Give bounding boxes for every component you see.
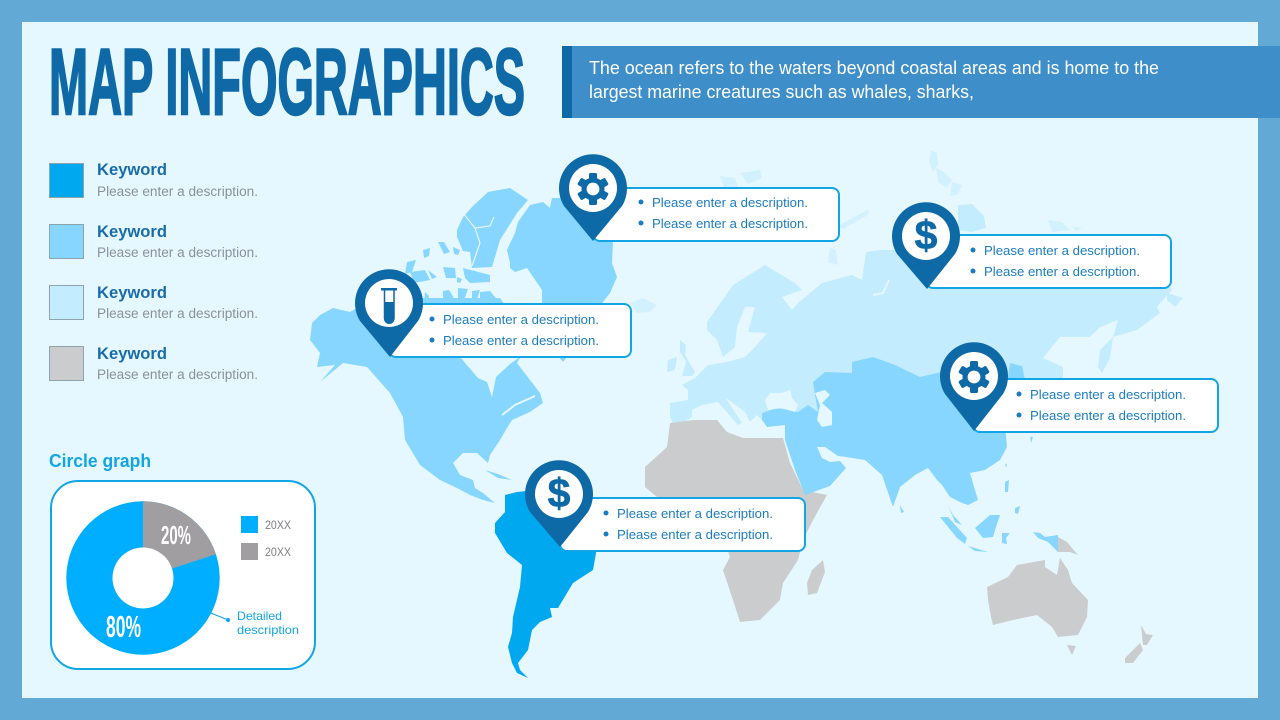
callout: gear pin China: Please enter a description. bbox=[1030, 387, 1186, 402]
legend item 2: Please enter a description. bbox=[97, 245, 258, 260]
region: Eurasia north (light blue) bbox=[667, 204, 1183, 430]
legend bbox=[50, 160, 258, 382]
region: Oceania (gray) bbox=[987, 537, 1153, 663]
legend item 2: Keyword bbox=[97, 222, 167, 241]
region: Asia south (mid blue) bbox=[762, 357, 1058, 552]
region: Canadian channels bbox=[463, 213, 535, 415]
region: pale arctic islands bbox=[630, 150, 1082, 313]
callout: gear pin north: Please enter a description. bbox=[652, 195, 808, 210]
callout: dollar pin Russia: Please enter a description. bbox=[984, 243, 1140, 258]
donut chart: 20% bbox=[161, 520, 191, 550]
detailed description callout: description bbox=[237, 623, 299, 637]
region: Hudson Bay cutout bbox=[460, 357, 520, 397]
header description banner bbox=[562, 46, 1280, 118]
icon: gear bbox=[958, 361, 990, 393]
legend item 4 bbox=[50, 344, 258, 382]
world map bbox=[310, 150, 1183, 678]
legend item 1: Please enter a description. bbox=[97, 184, 258, 199]
callout: test tube pin: Please enter a description. bbox=[443, 312, 599, 327]
callout: dollar pin Russia bbox=[892, 202, 1171, 289]
icon: dollar: $ bbox=[915, 212, 938, 258]
callout: dollar pin South America: Please enter a description. bbox=[617, 527, 773, 542]
header description banner: largest marine creatures such as whales, sharks, bbox=[589, 82, 974, 102]
legend item 3 bbox=[50, 283, 258, 321]
callout: dollar pin South America bbox=[525, 460, 805, 551]
circle graph panel bbox=[51, 481, 315, 669]
icon: dollar: $ bbox=[548, 470, 571, 516]
region: inland seas bbox=[765, 390, 832, 427]
chart legend bbox=[241, 516, 291, 560]
circle graph heading: Circle graph bbox=[49, 451, 151, 471]
region: Gulf of Ob bbox=[873, 280, 889, 295]
legend item 1: Keyword bbox=[97, 160, 167, 179]
detailed description callout: Detailed bbox=[237, 609, 282, 623]
region: North America and Greenland (mid blue) bbox=[310, 188, 617, 503]
chart legend: 20XX bbox=[265, 518, 291, 532]
detailed description callout bbox=[211, 609, 299, 637]
legend item 4: Please enter a description. bbox=[97, 367, 258, 382]
legend item 3: Please enter a description. bbox=[97, 306, 258, 321]
chart legend: 20XX bbox=[265, 545, 291, 559]
callout: gear pin China: Please enter a description. bbox=[1030, 408, 1186, 423]
donut chart bbox=[66, 501, 220, 655]
region: Africa (gray) bbox=[645, 420, 827, 622]
legend item 1 bbox=[50, 160, 258, 199]
text: MAP INFOGRAPHICS bbox=[49, 29, 525, 134]
legend item 3: Keyword bbox=[97, 283, 167, 302]
callout: test tube pin: Please enter a description. bbox=[443, 333, 599, 348]
icon: test tube bbox=[381, 288, 397, 324]
callout: dollar pin Russia: Please enter a description. bbox=[984, 264, 1140, 279]
legend item 4: Keyword bbox=[97, 344, 167, 363]
header description banner: The ocean refers to the waters beyond coastal areas and is home to the bbox=[589, 58, 1159, 78]
icon: gear bbox=[577, 173, 609, 205]
callout: test tube pin bbox=[355, 269, 631, 357]
legend item 2 bbox=[50, 222, 258, 260]
callout: gear pin north bbox=[559, 154, 839, 241]
callout: dollar pin South America: Please enter a description. bbox=[617, 506, 773, 521]
callout: gear pin north: Please enter a description. bbox=[652, 216, 808, 231]
callout: gear pin China bbox=[940, 342, 1218, 432]
donut chart: 80% bbox=[106, 609, 141, 644]
region: South America (bright blue) bbox=[495, 490, 596, 678]
